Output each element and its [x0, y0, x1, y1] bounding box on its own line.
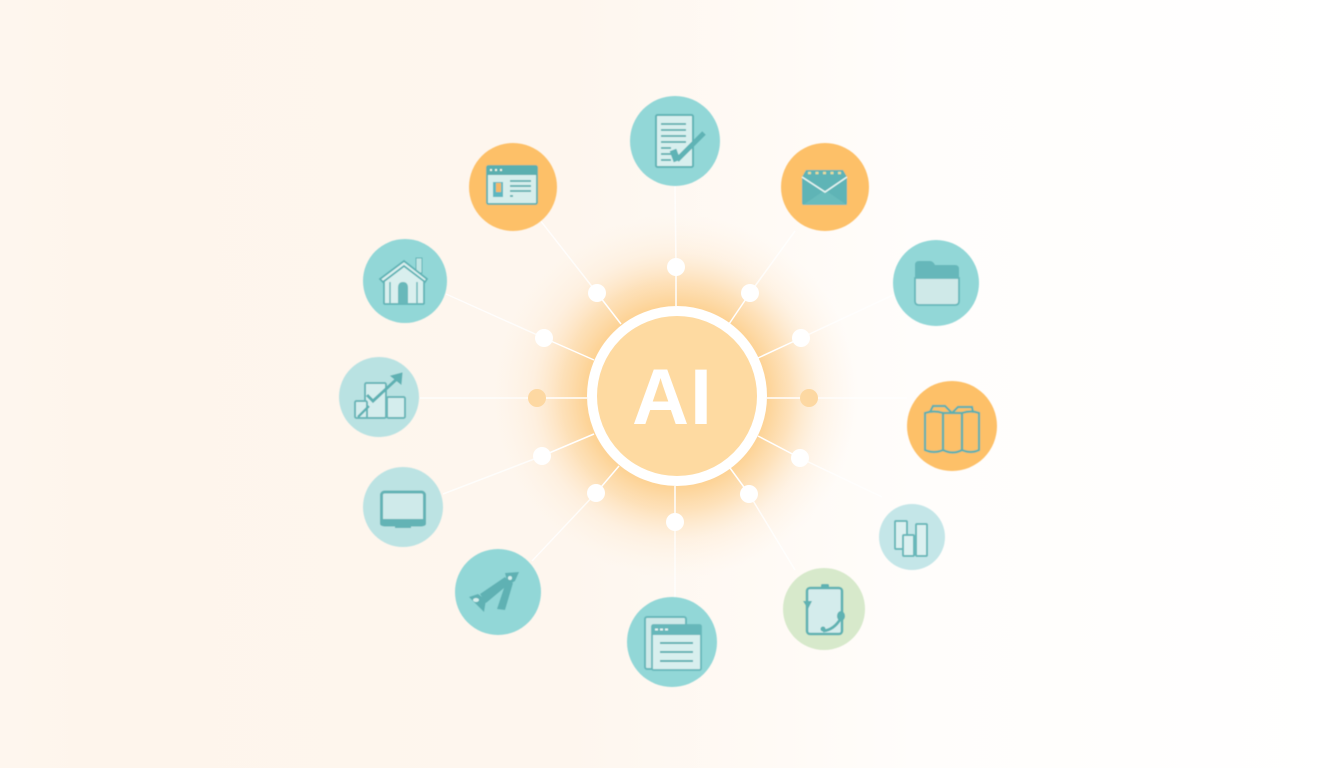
icon: document with checkmark — [630, 96, 720, 186]
icon: monitor — [363, 467, 443, 547]
central AI hub — [592, 311, 762, 481]
AI label: AI — [632, 352, 713, 441]
icon: folder — [893, 240, 979, 326]
central glow — [494, 214, 858, 578]
icon: envelope on orange — [781, 143, 869, 231]
icon: tool — [455, 549, 541, 635]
icon: tablet with arrows on green — [783, 568, 865, 650]
icon: house — [363, 239, 447, 323]
icon: stacked browser windows — [627, 597, 717, 687]
icon: growth chart — [339, 357, 419, 437]
connector lines — [420, 185, 907, 598]
connector nodes — [528, 258, 818, 531]
icon: three cylinders on orange — [907, 381, 997, 471]
icon: browser window on orange — [469, 143, 557, 231]
icon: bar columns — [879, 504, 945, 570]
